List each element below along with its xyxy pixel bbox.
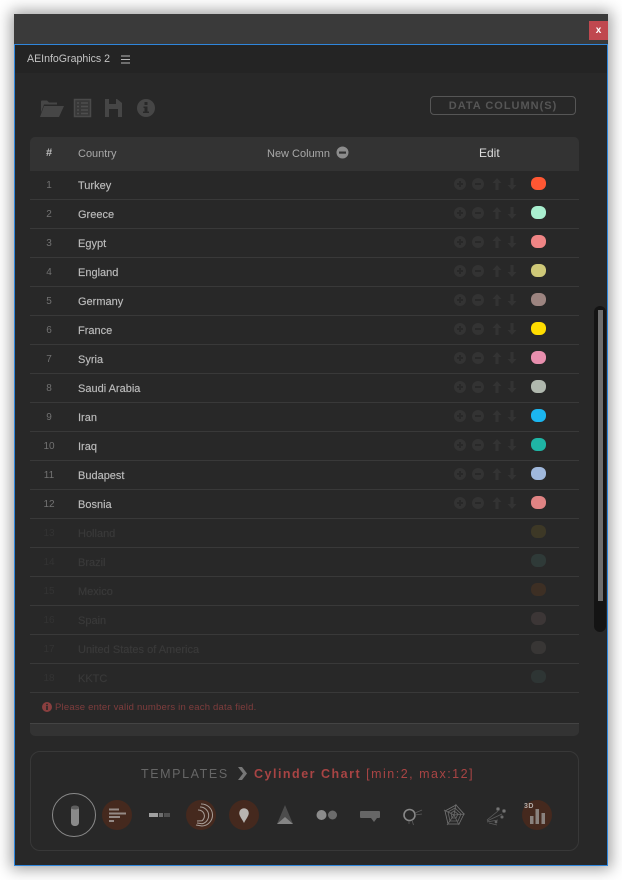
row 8: Saudi Arabia (78, 383, 140, 395)
row 11: Budapest (78, 470, 124, 482)
row 2: 2 (46, 209, 52, 220)
row 1: Turkey (78, 180, 111, 192)
row 3 (30, 229, 579, 258)
icon: spiral (186, 800, 216, 830)
icon: dashes (149, 813, 170, 817)
icon: cylinder selected (52, 794, 96, 836)
tab bar (15, 45, 607, 73)
row 9 (30, 403, 579, 432)
row 13 disabled (30, 519, 579, 548)
row 9: Iran (78, 412, 97, 424)
row 1: 1 (46, 180, 52, 191)
row 17 disabled: 17 (43, 644, 55, 655)
row 13 disabled: Holland (78, 528, 115, 540)
icon: radar (444, 804, 465, 825)
table footer strip (30, 723, 579, 736)
row 4: 4 (46, 267, 52, 278)
row 6 (30, 316, 579, 345)
row 5: Germany (78, 296, 123, 308)
message text: Please enter valid numbers in each data field. (55, 702, 256, 713)
icon: 3D bars: 3D (524, 803, 534, 810)
row 9: 9 (46, 412, 52, 423)
row 5 (30, 287, 579, 316)
row 13 disabled: 13 (43, 528, 55, 539)
icon: save (105, 99, 122, 117)
row 10: 10 (43, 441, 55, 452)
row 1 (30, 171, 579, 200)
scrollbar thumb (598, 310, 603, 601)
icon: list (74, 100, 90, 116)
row 12 (30, 490, 579, 519)
row 16 disabled: Spain (78, 615, 106, 627)
row 8: 8 (46, 383, 52, 394)
close button: x (596, 25, 601, 36)
row 6: 6 (46, 325, 52, 336)
row 10: Iraq (78, 441, 97, 453)
icon: chevron (238, 767, 247, 780)
row 10 (30, 432, 579, 461)
row 18 disabled: KKTC (78, 673, 107, 685)
icon: dots (316, 810, 337, 820)
row 17 disabled: United States of America (78, 644, 199, 656)
row 16 disabled: 16 (43, 615, 55, 626)
row 16 disabled (30, 606, 579, 635)
selected template name: Cylinder Chart [min:2, max:12] (254, 767, 474, 781)
icon: info (137, 99, 155, 117)
column: country: Country (78, 148, 117, 160)
row 3: Egypt (78, 238, 106, 250)
icon: ring (404, 810, 422, 825)
templates heading: TEMPLATES (141, 767, 229, 781)
row 18 disabled (30, 664, 579, 693)
toolbar icons (40, 98, 155, 118)
row 12: Bosnia (78, 499, 112, 511)
templates panel (30, 751, 579, 851)
icon: map pin (229, 800, 259, 830)
row 15 disabled (30, 577, 579, 606)
row 17 disabled (30, 635, 579, 664)
row 6: France (78, 325, 112, 337)
icon: pyramid (277, 805, 293, 824)
row 3: 3 (46, 238, 52, 249)
row 7: Syria (78, 354, 103, 366)
column: number: # (46, 147, 52, 159)
column: edit: Edit (479, 146, 500, 160)
row 11: 11 (44, 470, 54, 481)
icon: bar chart (102, 800, 132, 830)
row 14 disabled: 14 (43, 557, 55, 568)
row 14 disabled (30, 548, 579, 577)
icon: scatter lines (487, 808, 506, 825)
row 4: England (78, 267, 118, 279)
validation message (42, 702, 256, 713)
row 2: Greece (78, 209, 114, 221)
row 18 disabled: 18 (43, 673, 55, 684)
icon: speech bar (360, 811, 380, 822)
icon: open folder (40, 100, 64, 117)
close button (589, 21, 608, 40)
row 5: 5 (46, 296, 52, 307)
row 15 disabled: Mexico (78, 586, 113, 598)
tab title: AEInfoGraphics 2 (27, 53, 110, 65)
row 2 (30, 200, 579, 229)
scrollbar (594, 306, 606, 632)
data columns button (430, 96, 576, 115)
row 8 (30, 374, 579, 403)
table header (30, 137, 579, 171)
icon: warning (42, 702, 52, 712)
window title bar (14, 14, 608, 45)
column: new column: New Column (267, 148, 330, 160)
template icons (52, 793, 552, 837)
row 15 disabled: 15 (43, 586, 55, 597)
data columns button: DATA COLUMN(S) (449, 100, 557, 112)
row 11 (30, 461, 579, 490)
icon: panel menu (121, 56, 130, 64)
row 4 (30, 258, 579, 287)
row 12: 12 (43, 499, 55, 510)
row 14 disabled: Brazil (78, 557, 106, 569)
icon: 3D bars (522, 800, 552, 830)
row 7 (30, 345, 579, 374)
row 7: 7 (46, 354, 52, 365)
icon: remove column (336, 146, 348, 158)
